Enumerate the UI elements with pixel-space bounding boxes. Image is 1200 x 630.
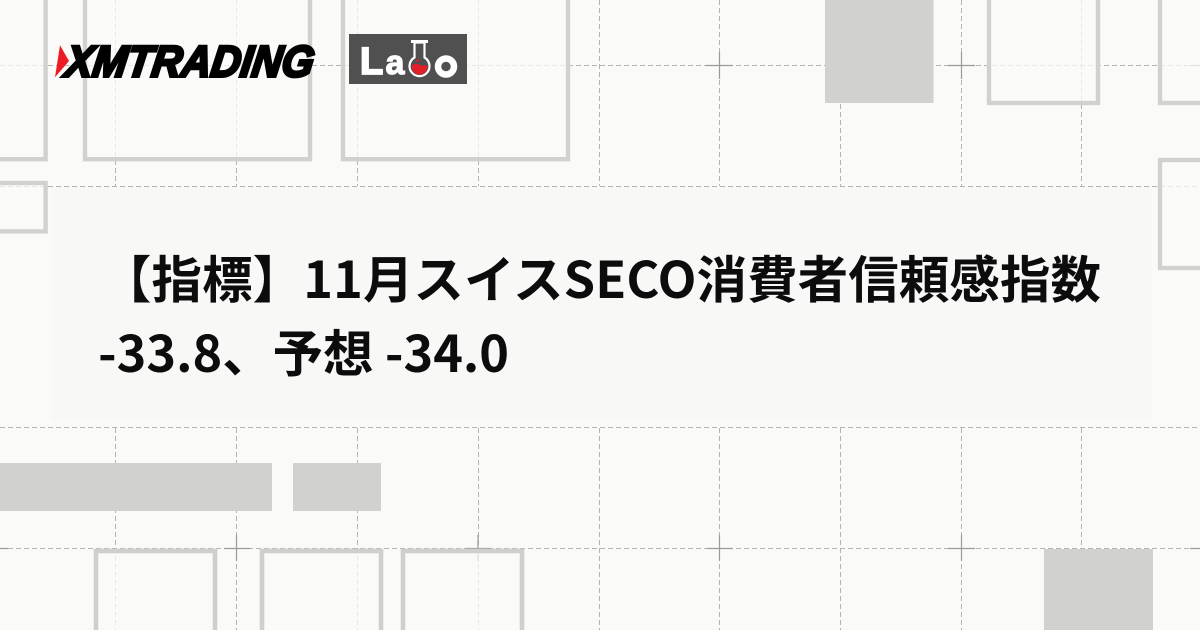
title: -33.8、予想 -34.0	[98, 314, 509, 387]
outlined boxes top	[0, 0, 1200, 268]
title	[98, 240, 1101, 387]
outlined boxes bottom	[96, 551, 522, 630]
logo: Lab: a	[386, 44, 406, 82]
title: 【指標】11月スイスSECO消費者信頼感指数	[101, 240, 1101, 313]
central panel	[52, 187, 1152, 420]
logo: Lab: L	[360, 41, 383, 83]
logo: Lab	[349, 34, 467, 84]
